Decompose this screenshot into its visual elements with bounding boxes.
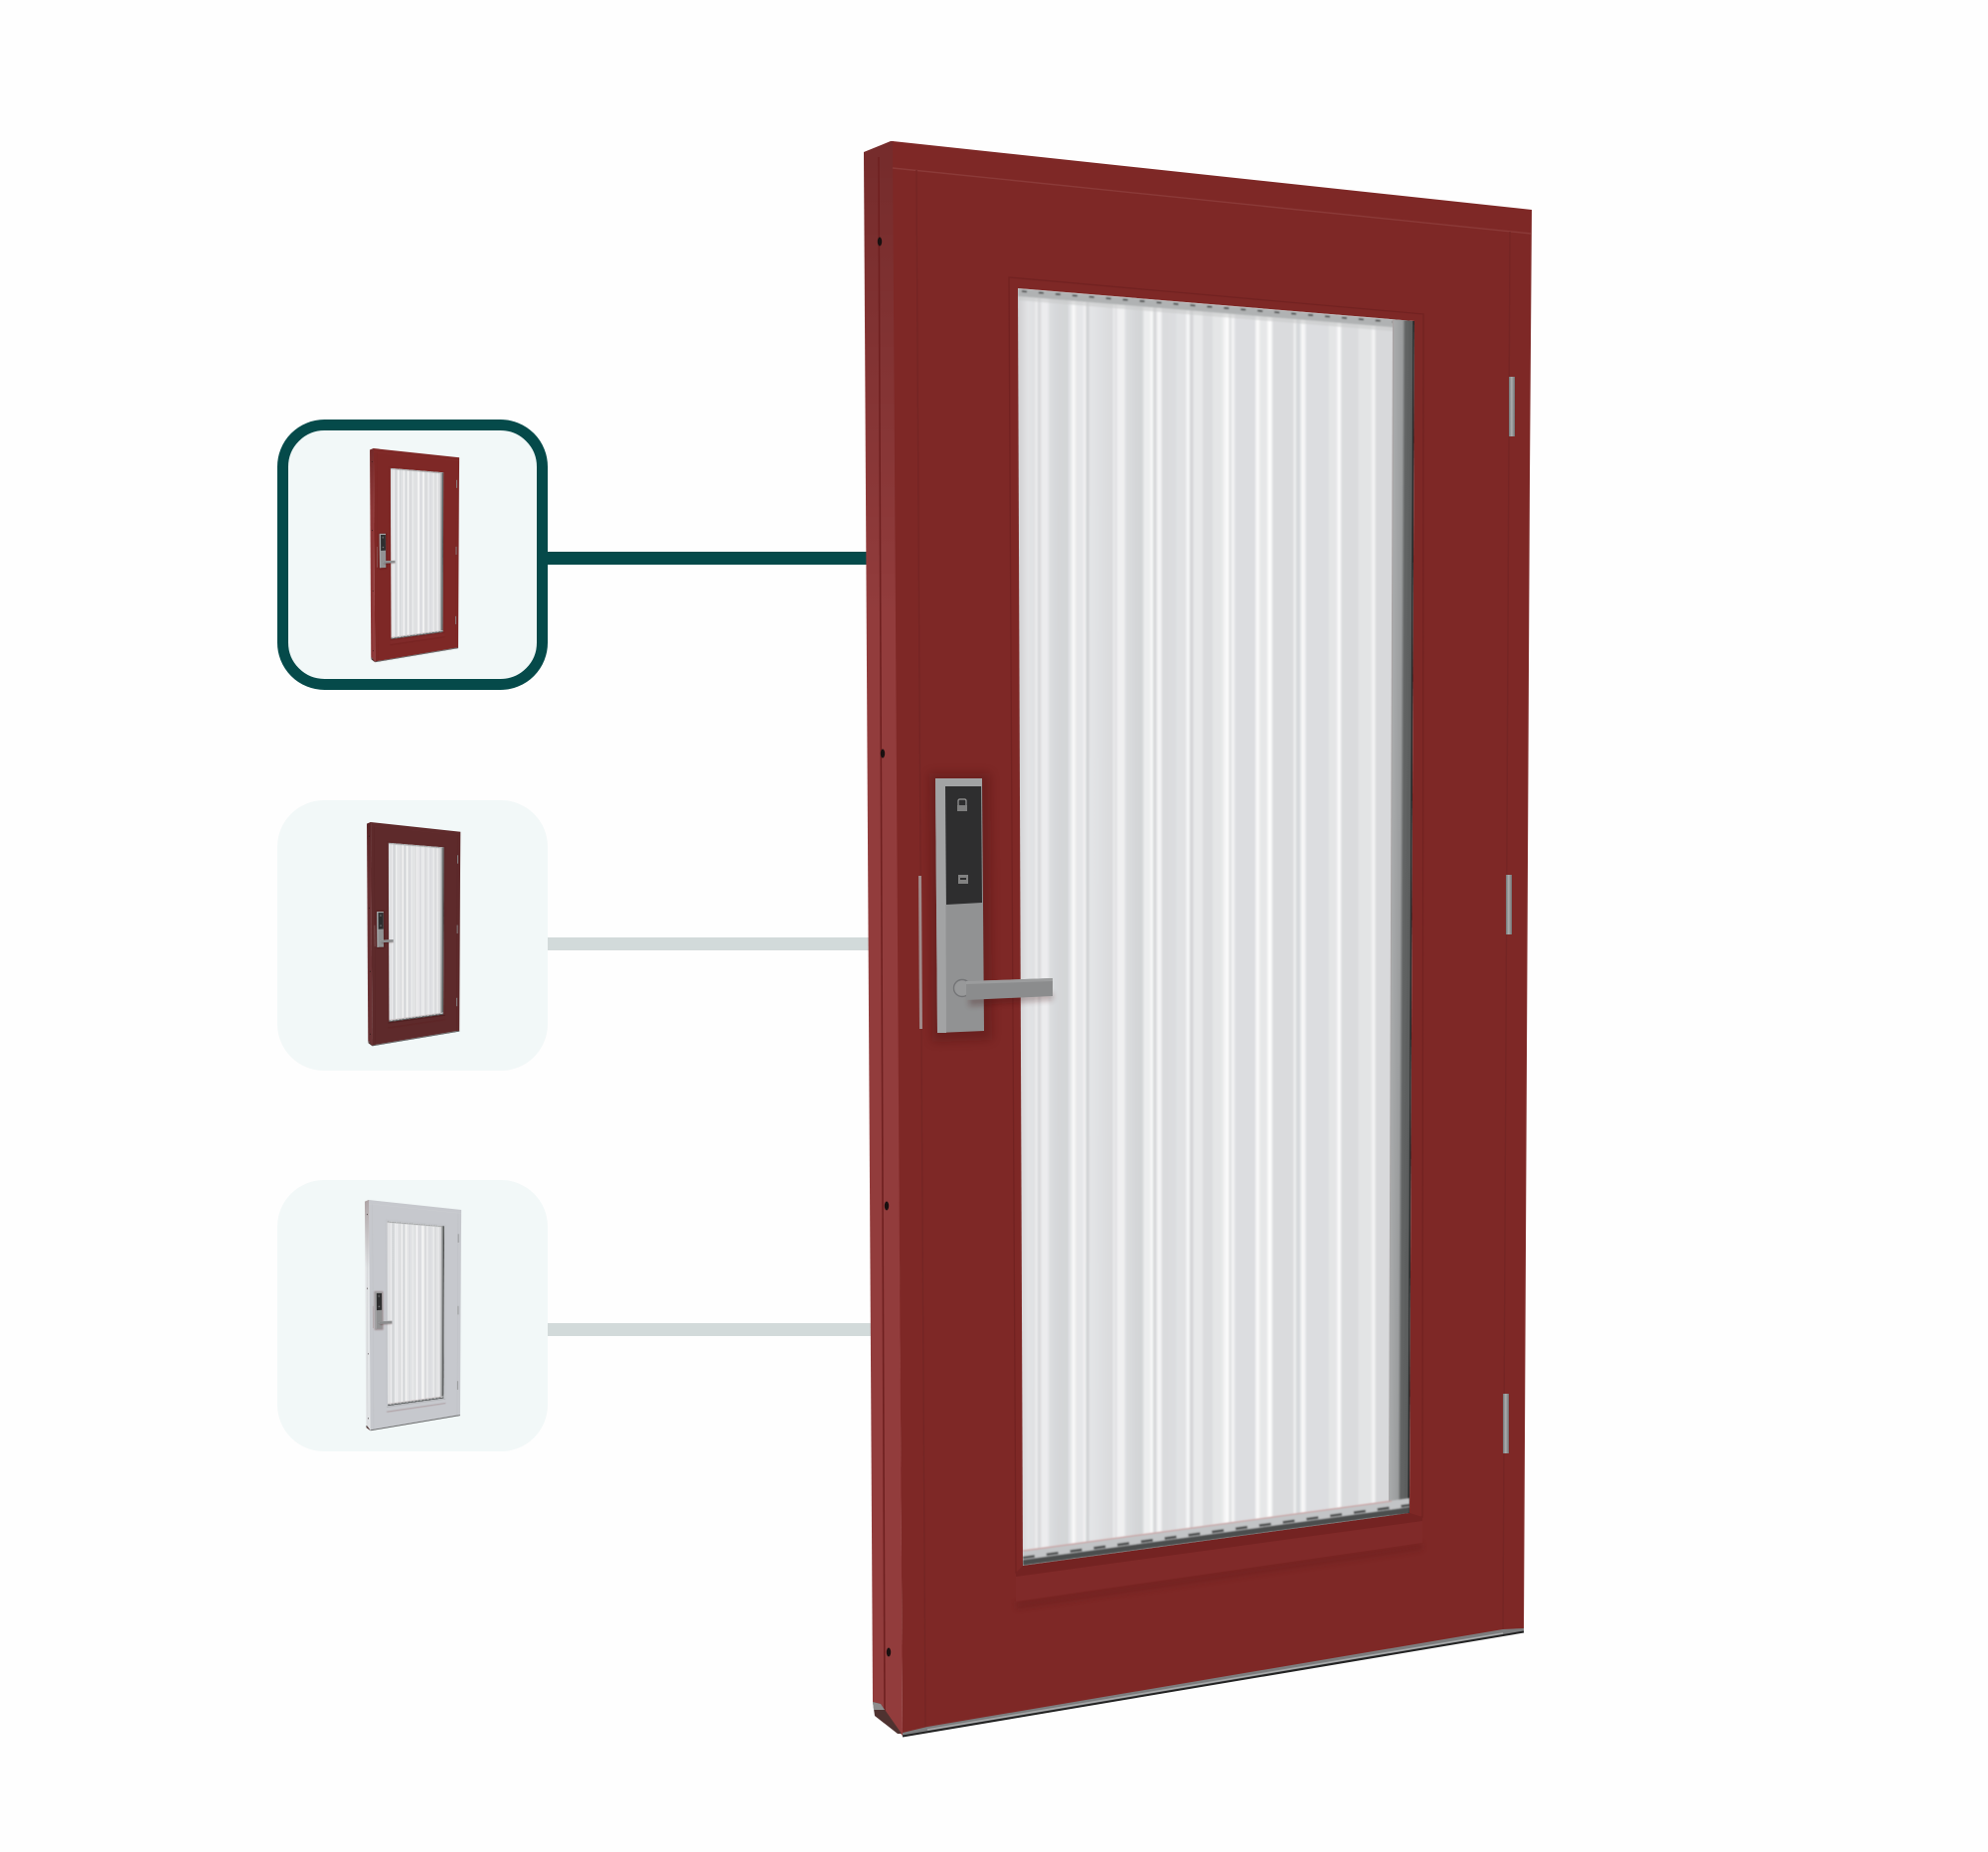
card background	[277, 800, 548, 1071]
main door	[864, 141, 1532, 1737]
option card: selected red door	[282, 425, 543, 684]
option card: grey door	[277, 1180, 548, 1451]
door front face	[893, 141, 1532, 1736]
door thumbnail: dark red	[367, 822, 460, 1046]
connector line: third option	[548, 1323, 882, 1336]
hinges	[1503, 377, 1515, 1453]
door side edge	[864, 141, 903, 1736]
door panel seams	[893, 168, 1531, 1727]
lock keypad panel	[945, 786, 982, 905]
door bottom seal	[903, 1628, 1524, 1737]
lock plate	[935, 778, 984, 1033]
card background with teal outline	[282, 425, 543, 684]
connector line: second option	[548, 937, 879, 950]
latch holes	[878, 237, 891, 1656]
lever handle	[966, 978, 1053, 1000]
door bottom corner	[873, 1702, 902, 1734]
card background	[277, 1180, 548, 1451]
window sill	[1016, 1513, 1422, 1609]
door thumbnail: red	[370, 448, 459, 662]
top gasket	[1018, 288, 1414, 333]
lever shadow	[969, 993, 1053, 1006]
bottom gasket	[1023, 1498, 1409, 1566]
window: ribbed glass	[1009, 283, 1421, 1571]
door lock	[929, 773, 1053, 1042]
lever rosette	[954, 980, 970, 996]
window recess outline	[1009, 277, 1423, 1573]
door thumbnail: grey	[365, 1200, 461, 1431]
door colour selector infographic	[277, 141, 1532, 1738]
connector line: selected option	[548, 552, 876, 565]
vertical edge pull	[918, 876, 922, 1029]
right glass reveal	[1389, 319, 1414, 1516]
option card: dark red door	[277, 800, 548, 1071]
